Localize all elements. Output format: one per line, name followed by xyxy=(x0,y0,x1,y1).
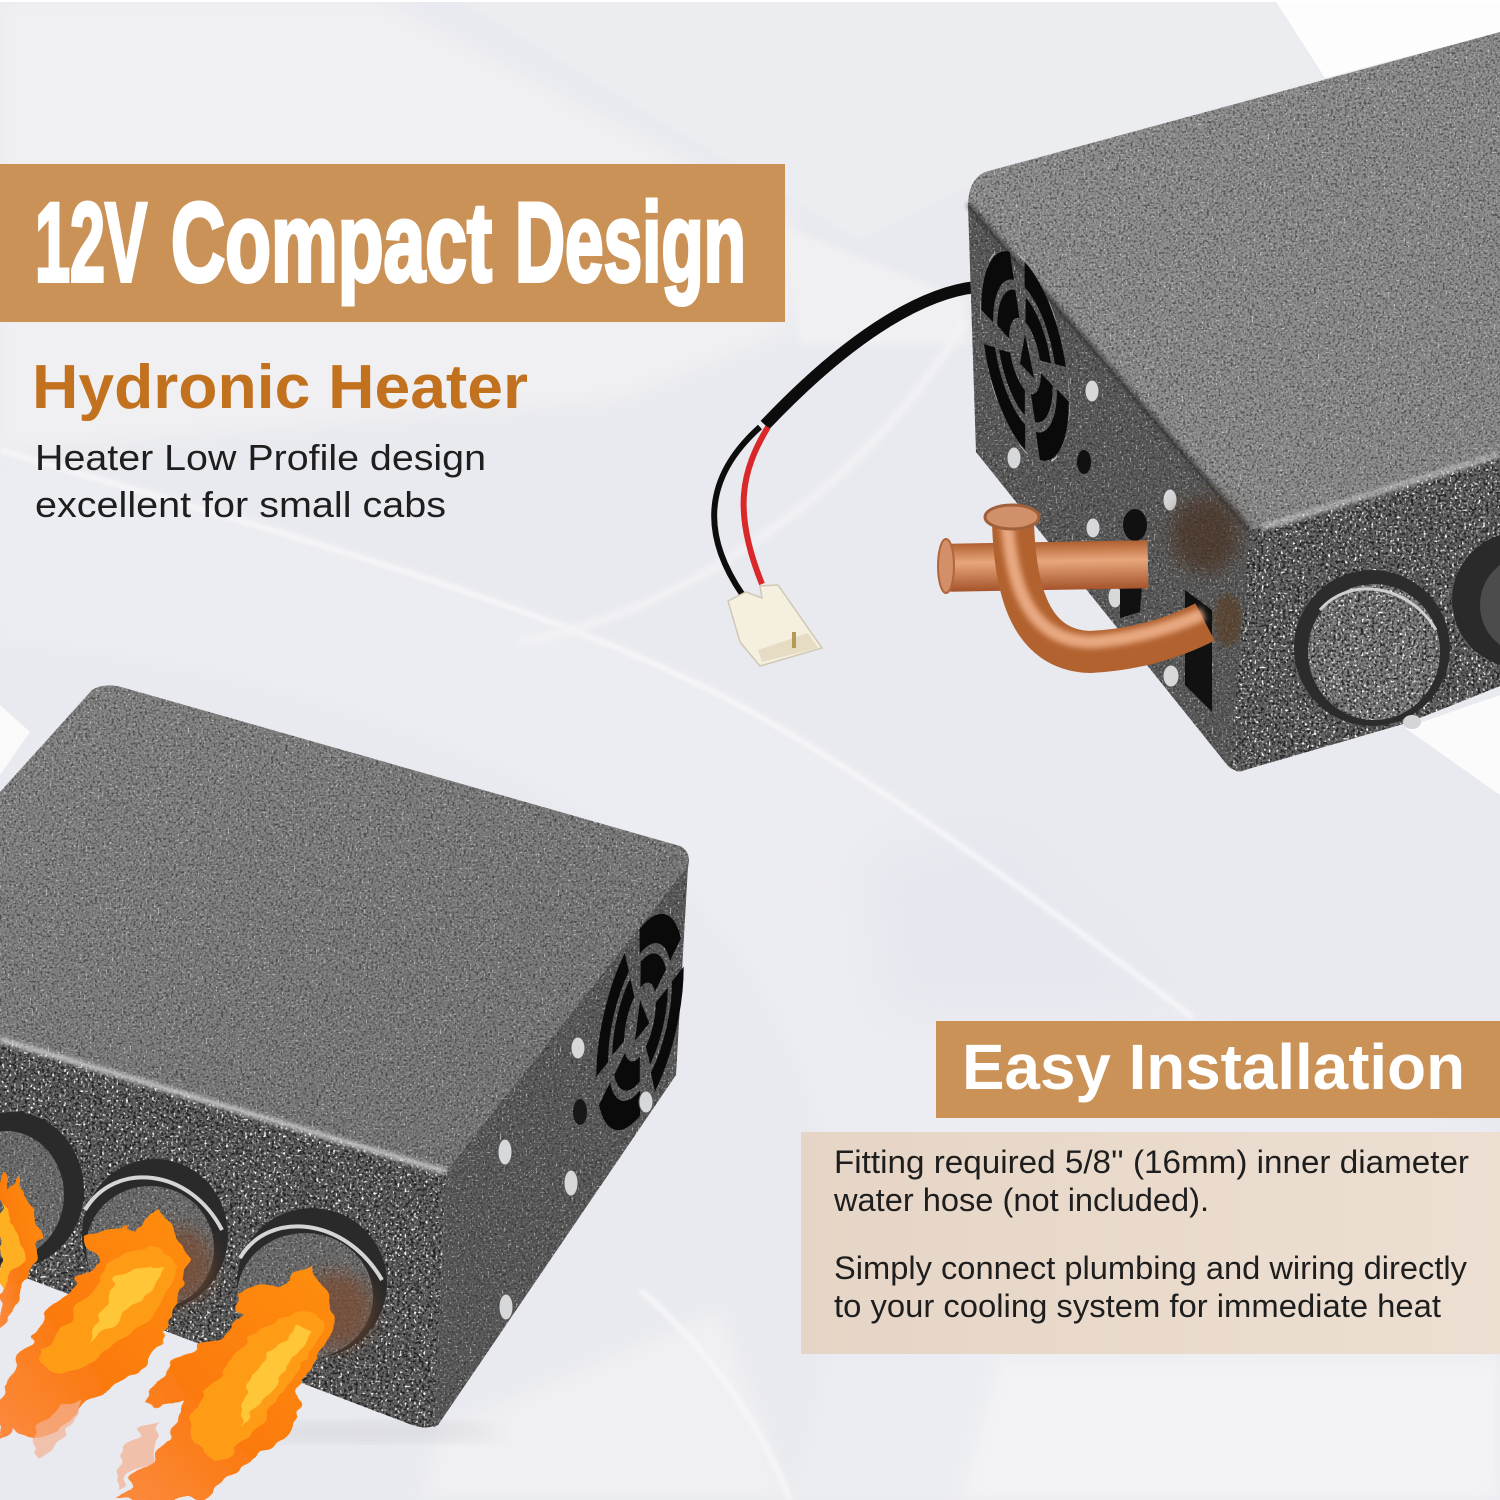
outlet 1 xyxy=(1294,570,1450,726)
heading banner: Easy Installation xyxy=(936,1021,1500,1118)
heater unit: rear view, top right xyxy=(938,32,1500,772)
flame left xyxy=(0,1168,42,1330)
text: connection note: Simply connect plumbing and wiring directly xyxy=(834,1250,1467,1286)
heading banner: 12V Compact Design xyxy=(0,164,785,322)
text block: low profile description: Heater Low Profile design xyxy=(35,437,486,478)
outlet right xyxy=(237,1208,387,1359)
top face xyxy=(0,685,689,1172)
heading banner: 12V Compact Design: Design xyxy=(515,180,746,305)
text: fitting requirement xyxy=(833,1144,1469,1218)
lower pipe xyxy=(985,505,1205,652)
icon: fan grille xyxy=(980,213,1070,499)
text: fitting requirement: water hose (not included). xyxy=(833,1182,1209,1218)
heading banner: 12V Compact Design: Compact xyxy=(171,180,492,305)
copper pipes xyxy=(938,505,1205,652)
heater unit: front view with flames, bottom left xyxy=(0,685,689,1500)
top face xyxy=(968,32,1500,530)
text block: low profile description xyxy=(35,437,486,525)
flames xyxy=(0,1168,335,1500)
text: connection note xyxy=(834,1250,1467,1324)
rivets xyxy=(498,1037,653,1320)
front face with outlets xyxy=(0,1040,446,1428)
wire harness with connector xyxy=(714,287,976,666)
text: fitting requirement: Fitting required 5/8'' (16mm) inner diameter xyxy=(834,1144,1469,1180)
icon: fan grille xyxy=(602,894,678,1150)
rivets xyxy=(1007,380,1179,687)
front face with outlets xyxy=(1230,453,1500,772)
subheading: Hydronic Heater: Hydronic Heater xyxy=(32,353,528,422)
heading banner: 12V Compact Design: 12V xyxy=(35,180,147,305)
icon: white plug connector xyxy=(728,585,822,666)
outlet left xyxy=(0,1112,84,1268)
panel: installation details xyxy=(801,1132,1500,1354)
text block: low profile description: excellent for small cabs xyxy=(35,484,446,525)
side panel with fan grille xyxy=(433,866,688,1427)
outlet middle xyxy=(82,1159,228,1311)
flame middle xyxy=(0,1206,190,1456)
upper pipe xyxy=(938,539,1148,593)
outlet 2 xyxy=(1452,532,1500,668)
heading banner: Easy Installation: Easy Installation xyxy=(962,1031,1465,1103)
flame right xyxy=(115,1262,335,1500)
side panel with fan grille xyxy=(968,204,1250,770)
text: connection note: to your cooling system for immediate heat xyxy=(834,1288,1441,1324)
